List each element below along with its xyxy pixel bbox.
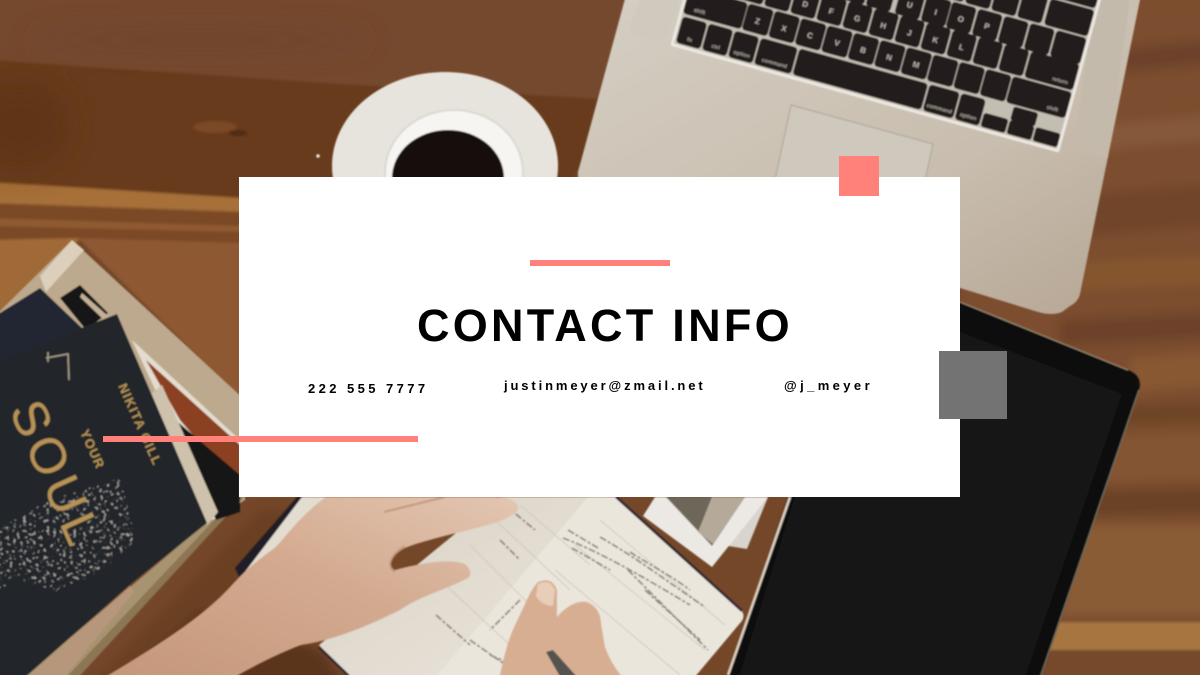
white contact card [239, 177, 960, 497]
keyboard: F [828, 7, 835, 17]
keyboard: X [780, 24, 788, 34]
keyboard: C [806, 31, 814, 41]
keyboard: B [859, 45, 867, 56]
book cover mark [46, 352, 69, 380]
book label: author: NIKITA GILL [115, 381, 165, 468]
open notebook [235, 497, 744, 675]
keyboard: I [933, 8, 938, 17]
keyboard: option [733, 50, 751, 60]
keyboard: U [906, 0, 914, 10]
keyboard: command [926, 103, 952, 116]
books stack [0, 240, 245, 675]
keyboard: K [931, 35, 940, 45]
long coral bar across card edge [103, 436, 418, 442]
keyboard: J [906, 28, 913, 38]
coral accent square [839, 156, 879, 196]
polaroid photo [643, 497, 768, 567]
keyboard: Z [754, 16, 761, 26]
keyboard: return [1051, 76, 1069, 86]
keyboard: N [885, 52, 893, 63]
social handle: @j_meyer [784, 378, 873, 393]
speckled cover artwork [0, 479, 134, 592]
keyboard: P [983, 21, 991, 32]
keyboard: M [912, 60, 921, 70]
email address: justinmeyer@zmail.net [504, 378, 706, 393]
book title: soul: SOUL [0, 392, 114, 557]
tablet [726, 300, 1140, 675]
right hand with pen [499, 580, 625, 675]
keyboard: ctrl [711, 44, 721, 52]
keyboard: G [853, 14, 861, 24]
left hand [100, 497, 518, 675]
keyboard: shift [1046, 105, 1059, 114]
keyboard: fn [686, 37, 693, 44]
keyboard: option [959, 112, 978, 122]
coral bar above title [530, 260, 670, 266]
keyboard: shift [693, 8, 706, 17]
trackpad [775, 105, 933, 180]
title: CONTACT INFO [417, 300, 793, 351]
keyboard: command [761, 57, 788, 70]
keyboard: H [879, 21, 887, 31]
dark book cover [0, 314, 207, 675]
gray accent square [939, 351, 1007, 419]
keyboard: L [958, 42, 965, 52]
phone number: 222 555 7777 [308, 381, 429, 396]
laptop [578, 0, 1141, 314]
coffee cup on saucer [316, 72, 558, 260]
book label: your: YOUR [77, 427, 108, 471]
keyboard [670, 0, 1110, 153]
keyboard: V [833, 38, 841, 48]
keyboard: O [957, 14, 965, 24]
